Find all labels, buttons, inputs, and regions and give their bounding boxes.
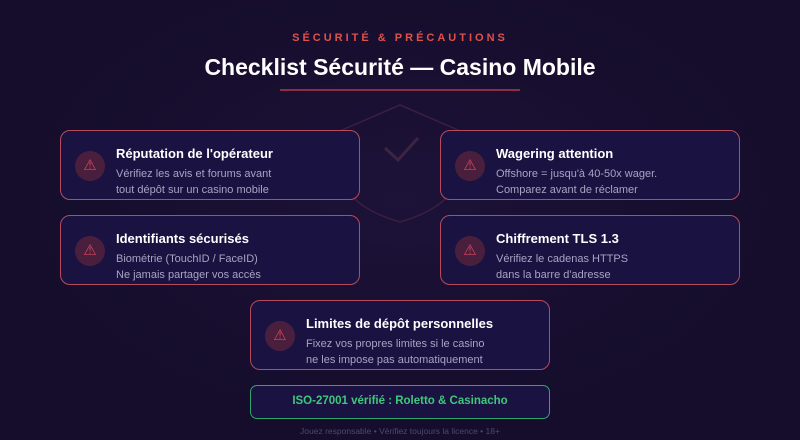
- card: reputation: [60, 130, 360, 200]
- card: limites: ⚠: [273, 327, 287, 344]
- card: reputation: ⚠: [83, 157, 97, 174]
- title: Checklist Sécurité — Casino Mobile: [204, 54, 596, 80]
- card: limites: Fixez vos propres limites si le casino: [306, 338, 485, 350]
- card: wagering: Wagering attention: [496, 146, 613, 161]
- card: identifiants: [60, 215, 360, 285]
- card: TLS: [440, 215, 740, 285]
- ISO badge: ISO-27001 vérifié : Roletto & Casinacho: [292, 395, 508, 407]
- card: identifiants: Identifiants sécurisés: [116, 231, 249, 246]
- footer: Jouez responsable • Vérifiez toujours la licence • 18+: [300, 426, 500, 436]
- title underline: [280, 89, 520, 91]
- card: wagering: ⚠: [463, 157, 477, 174]
- card: TLS: Chiffrement TLS 1.3: [496, 231, 619, 246]
- card: identifiants: ⚠: [83, 242, 97, 259]
- card: reputation: Vérifiez les avis et forums avant: [116, 168, 271, 180]
- card: wagering: [440, 130, 740, 200]
- eyebrow: SÉCURITÉ & PRÉCAUTIONS: [292, 32, 508, 44]
- card: TLS: Vérifiez le cadenas HTTPS: [496, 253, 628, 265]
- card: identifiants: Biométrie (TouchID / FaceID): [116, 253, 258, 265]
- ISO badge: [250, 385, 550, 419]
- card: wagering: Comparez avant de réclamer: [496, 184, 638, 196]
- card: limites: Limites de dépôt personnelles: [306, 316, 493, 331]
- card: wagering: Offshore = jusqu'à 40-50x wager.: [496, 168, 657, 180]
- card: TLS: ⚠: [463, 242, 477, 259]
- card: reputation: Réputation de l'opérateur: [116, 146, 273, 161]
- card: TLS: dans la barre d'adresse: [496, 269, 611, 281]
- card: identifiants: Ne jamais partager vos accès: [116, 269, 261, 281]
- card: limites: ne les impose pas automatiquement: [306, 354, 483, 366]
- shield watermark: [341, 104, 459, 223]
- card: limites: [250, 300, 550, 370]
- card: reputation: tout dépôt sur un casino mobile: [116, 184, 269, 196]
